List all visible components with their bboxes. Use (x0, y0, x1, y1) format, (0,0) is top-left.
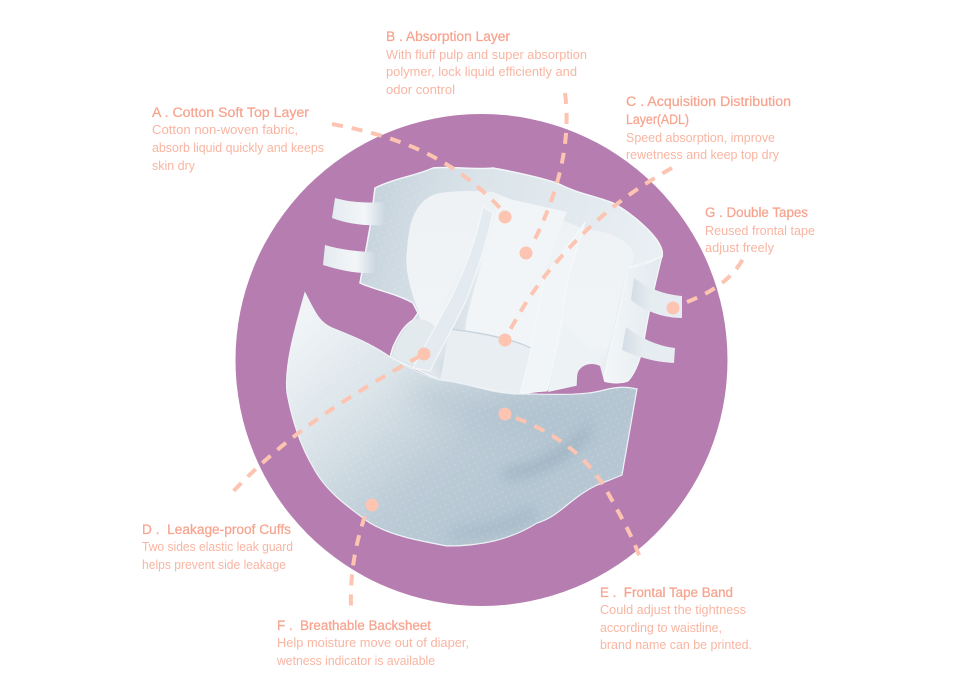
marker F (366, 498, 378, 512)
label E: Frontal Tape Band: according to waistline, (600, 621, 722, 635)
label A: Cotton Soft Top Layer: A . Cotton Soft Top Layer (152, 105, 310, 120)
right cuff (520, 222, 585, 393)
back waist panel (360, 167, 662, 395)
leader lines and markers (228, 93, 744, 607)
marker B (520, 246, 532, 260)
right leg gather (548, 324, 603, 392)
leader E (516, 418, 640, 558)
seam line (450, 329, 531, 348)
label B: Absorption Layer: With fluff pulp and super absorption (386, 48, 587, 62)
front waist panel (287, 293, 637, 546)
label A: Cotton Soft Top Layer: absorb liquid quickly and keeps (152, 141, 324, 155)
label F: Breathable Backsheet: wetness indicator is available (276, 654, 435, 668)
label C: Acquisition Distribution Layer: rewetness and keep top dry (626, 148, 780, 162)
right tapes (622, 278, 682, 363)
marker D (418, 348, 430, 360)
label D: Leakage-proof Cuffs: helps prevent side leakage (142, 558, 286, 572)
label G: Double Tapes: Reused frontal tape (705, 224, 815, 238)
front panel shading (310, 385, 634, 545)
inner shading (432, 271, 479, 378)
leader C (510, 168, 672, 330)
label A: Cotton Soft Top Layer: skin dry (152, 159, 196, 173)
label D: Leakage-proof Cuffs (142, 522, 293, 572)
back panel texture (360, 170, 433, 303)
absorbent core (406, 191, 634, 395)
label D: Leakage-proof Cuffs: Two sides elastic leak guard (142, 540, 293, 554)
label E: Frontal Tape Band (600, 585, 752, 652)
label E: Frontal Tape Band: E . Frontal Tape Band (600, 585, 733, 600)
label B: Absorption Layer: odor control (386, 83, 455, 97)
left leg gather (392, 319, 436, 368)
right side flap (603, 256, 662, 383)
left cuff (413, 207, 493, 371)
label B: Absorption Layer (386, 29, 587, 97)
label F: Breathable Backsheet: Help moisture move out of diaper, (277, 636, 469, 650)
label C: Acquisition Distribution Layer: Speed absorption, improve (626, 131, 775, 145)
label C: Acquisition Distribution Layer: C . Acquisition Distribution (626, 94, 791, 109)
label E: Frontal Tape Band: Could adjust the tightness (600, 603, 746, 617)
center strip (464, 197, 567, 395)
leader B (532, 93, 567, 245)
label G: Double Tapes (705, 205, 815, 255)
label A: Cotton Soft Top Layer: Cotton non-woven fabric, (152, 123, 298, 137)
label G: Double Tapes: G . Double Tapes (705, 205, 808, 220)
label G: Double Tapes: adjust freely (705, 241, 775, 255)
leader G (687, 257, 744, 302)
marker E (498, 408, 512, 420)
marker C (498, 334, 512, 346)
diaper illustration (280, 167, 682, 550)
label C: Acquisition Distribution Layer (626, 94, 791, 162)
lower seam area (440, 330, 531, 394)
purple circle background (236, 114, 728, 606)
marker G (666, 302, 680, 314)
marker A (498, 210, 512, 224)
label B: Absorption Layer: polymer, lock liquid efficiently and (386, 65, 577, 79)
leader D (228, 356, 420, 497)
leader F (351, 516, 365, 607)
label C: Acquisition Distribution Layer: Layer(ADL) (626, 112, 689, 127)
label F: Breathable Backsheet: F . Breathable Backsheet (277, 618, 431, 633)
label D: Leakage-proof Cuffs: D . Leakage-proof Cuffs (142, 522, 291, 537)
label B: Absorption Layer: B . Absorption Layer (386, 29, 511, 44)
label A: Cotton Soft Top Layer (152, 105, 324, 173)
leader A (332, 124, 500, 208)
label F: Breathable Backsheet (276, 618, 469, 668)
left back tapes (323, 198, 387, 273)
label E: Frontal Tape Band: brand name can be printed. (600, 638, 752, 652)
back-sheet notch (575, 364, 612, 394)
